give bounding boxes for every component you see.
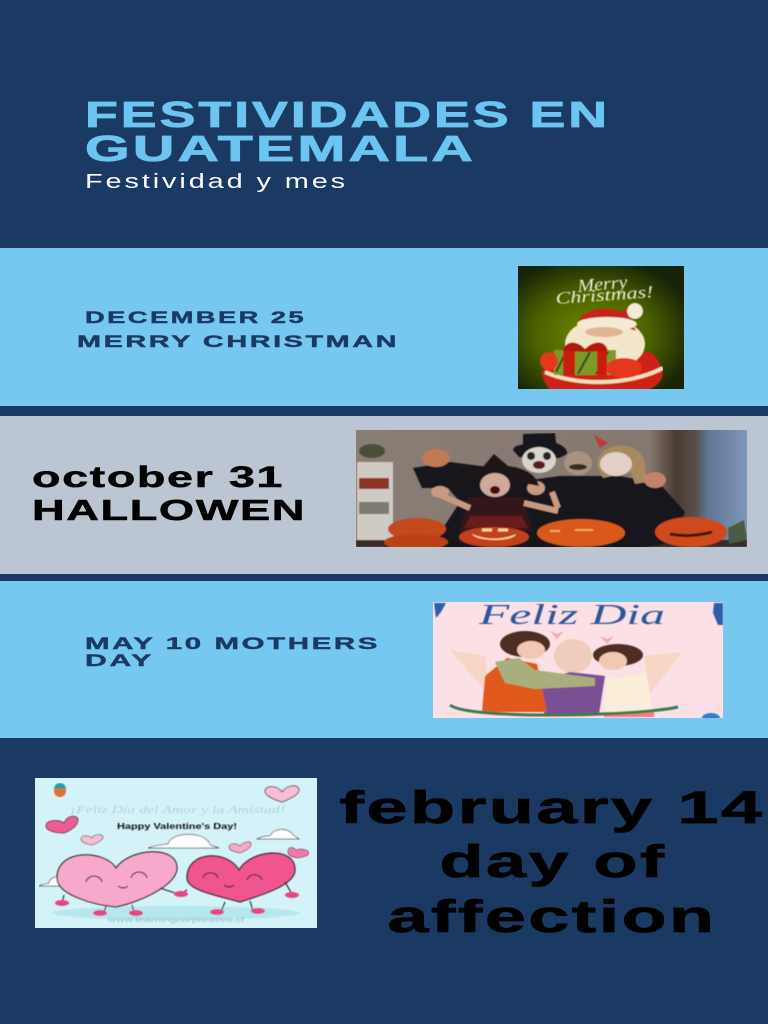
- pumpkin table shadow: [356, 540, 747, 547]
- wings: [450, 650, 682, 694]
- raised hand: [422, 449, 450, 467]
- girl's dress: [460, 497, 532, 531]
- baby: [564, 451, 592, 475]
- title: FESTIVIDADES EN: [85, 94, 610, 135]
- December text: MERRY CHRISTMAN: [77, 332, 399, 351]
- father and family dark bodies: [413, 462, 685, 548]
- clouds: [148, 834, 219, 848]
- faces and limbs: [62, 872, 292, 912]
- heart: left: [57, 852, 177, 907]
- witch hat: [490, 465, 540, 486]
- mother's hand: [644, 472, 666, 488]
- image: Merry Christmas Santa: [518, 266, 684, 392]
- left woman arm: [495, 658, 595, 689]
- santa figure: [542, 352, 662, 392]
- girl's arms: [438, 492, 558, 511]
- feet and hands: [55, 891, 299, 916]
- pumpkins: [388, 518, 446, 540]
- ground shadow: [52, 906, 300, 920]
- left woman vest: [482, 658, 547, 712]
- panel: December band: [0, 248, 768, 406]
- title: GUATEMALA: [85, 128, 476, 169]
- image: Feliz Dia mothers: [433, 600, 723, 723]
- shelf: [357, 462, 393, 542]
- October text: [32, 461, 306, 527]
- heart: right: [187, 853, 295, 902]
- subtitle: Festividad y mes: [85, 171, 348, 193]
- panel: October band: [0, 416, 768, 574]
- girl's face: [480, 473, 510, 497]
- right woman hair: [593, 644, 643, 666]
- February text: day of: [440, 836, 666, 887]
- small hearts: [550, 631, 614, 644]
- October text: october 31: [32, 461, 284, 494]
- logo: [54, 785, 66, 797]
- May text: MAY 10 MOTHERS: [85, 634, 380, 653]
- mother's hair: [597, 445, 647, 484]
- right woman body: [605, 674, 653, 712]
- website: www.learningcorporativo.cl: [106, 917, 245, 924]
- small hearts: [265, 786, 299, 802]
- vine: [450, 705, 678, 715]
- mother's face: [600, 452, 632, 476]
- spanish greeting: ¡Feliz Día del Amor y la Amistad!: [70, 804, 285, 816]
- panel: May band: [0, 581, 768, 738]
- February text: [340, 782, 764, 942]
- December text: [77, 308, 399, 351]
- February text: affection: [388, 891, 716, 942]
- greeting text: Christmas!: [555, 282, 654, 308]
- image: Valentine's Day hearts: [35, 778, 317, 928]
- May text: DAY: [85, 651, 154, 670]
- greeting text: Merry: [575, 272, 628, 296]
- greeting text: Feliz Dia: [477, 600, 665, 631]
- May text: [85, 634, 380, 670]
- title: [85, 94, 610, 169]
- December text: DECEMBER 25: [85, 308, 306, 327]
- October text: HALLOWEN: [32, 495, 306, 527]
- father's face: [522, 447, 556, 473]
- left woman hair: [500, 631, 550, 657]
- father's hat: [513, 433, 567, 458]
- February text: february 14: [340, 782, 764, 833]
- grandmother: [554, 639, 592, 673]
- image: Halloween family: [356, 430, 747, 550]
- leaves: [434, 603, 723, 625]
- panel: header background: [0, 0, 768, 248]
- greeting text: [556, 278, 653, 304]
- english greeting: Happy Valentine's Day!: [117, 821, 237, 831]
